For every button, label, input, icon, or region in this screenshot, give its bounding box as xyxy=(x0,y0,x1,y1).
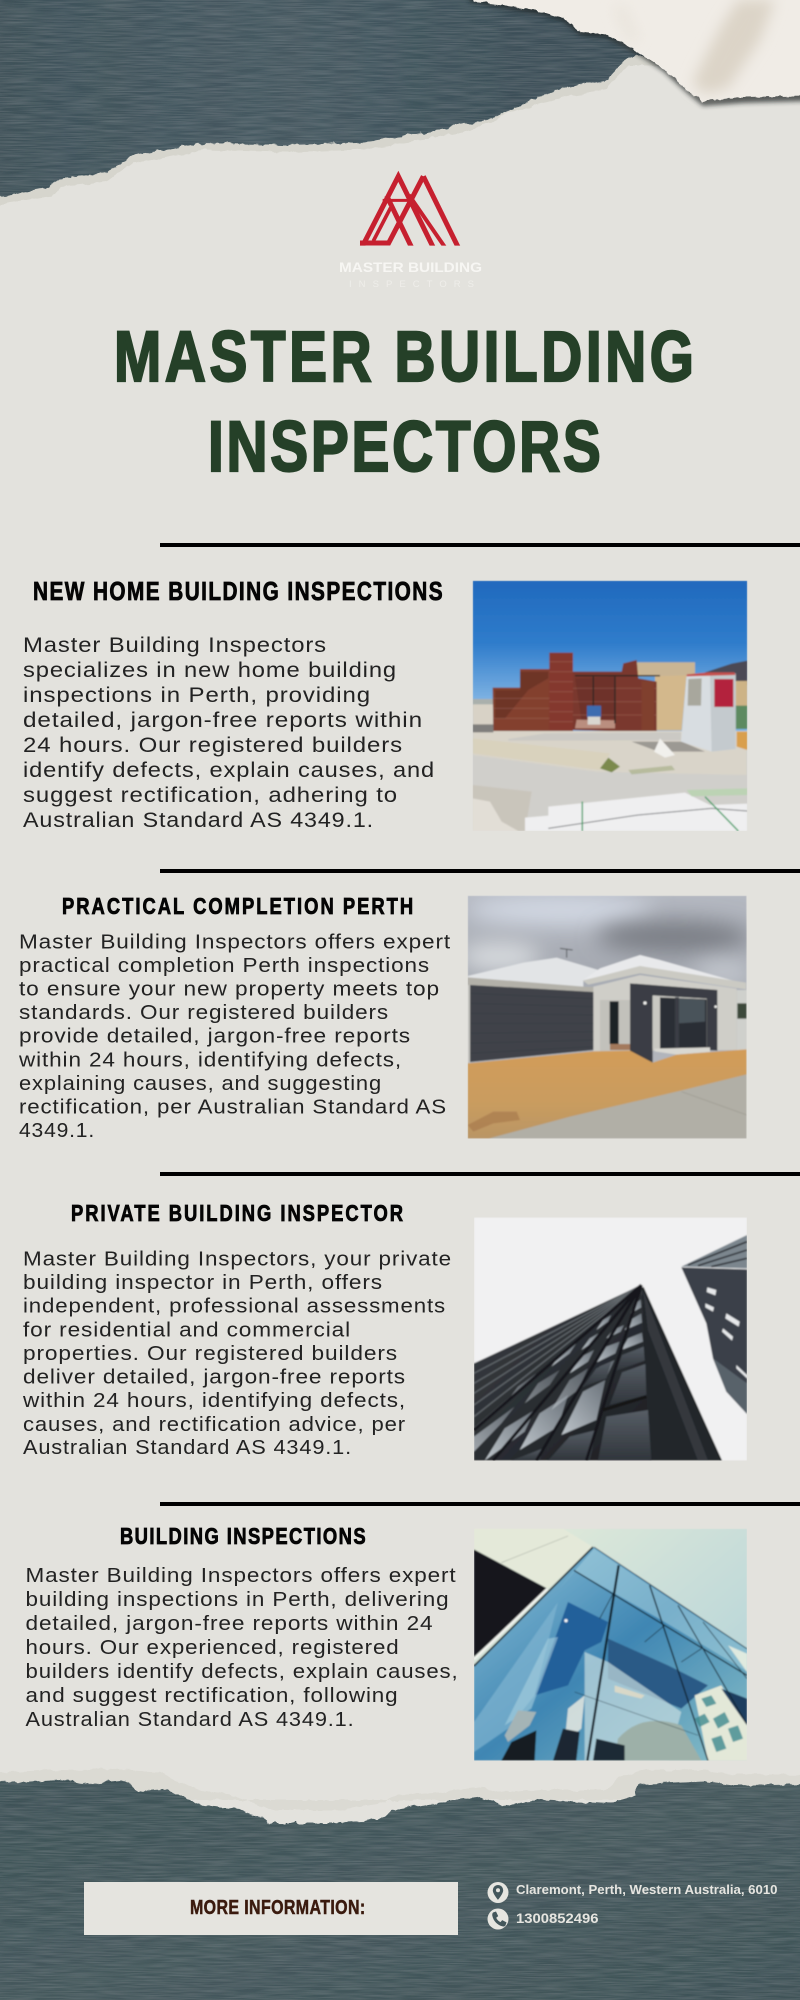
body text: within 24 hours, identifying defects, xyxy=(18,1048,402,1072)
photo: glass building from below xyxy=(474,1529,748,1761)
more information box: MORE INFORMATION: xyxy=(190,1896,365,1918)
phone number: 1300852496 xyxy=(516,1911,599,1926)
photo: skyscrapers from below xyxy=(474,1217,747,1461)
title: INSPECTORS xyxy=(208,407,601,486)
panel: practical completion perth xyxy=(18,894,753,1142)
icon: phone xyxy=(488,1908,508,1930)
body text: causes, and rectification advice, per xyxy=(23,1413,406,1436)
body text: independent, professional assessments xyxy=(23,1294,446,1318)
torn cream paper corner xyxy=(470,0,800,106)
body text: rectification, per Australian Standard AS xyxy=(19,1096,447,1118)
body text: provide detailed, jargon-free reports xyxy=(19,1024,411,1048)
body text: 4349.1. xyxy=(19,1119,95,1142)
body text: properties. Our registered builders xyxy=(23,1342,398,1365)
body text xyxy=(23,633,435,832)
body text: explaining causes, and suggesting xyxy=(19,1072,382,1095)
body text: Master Building Inspectors xyxy=(23,633,327,657)
heading: BUILDING INSPECTIONS xyxy=(120,1524,366,1550)
heading: PRIVATE BUILDING INSPECTOR xyxy=(71,1201,403,1227)
body text: building inspections in Perth, delivering xyxy=(26,1588,450,1611)
title xyxy=(114,317,694,486)
body text: deliver detailed, jargon-free reports xyxy=(23,1366,406,1388)
heading: NEW HOME BUILDING INSPECTIONS xyxy=(33,577,443,606)
contact details xyxy=(488,1882,778,1930)
logo mark xyxy=(360,176,460,252)
body text: practical completion Perth inspections xyxy=(19,954,430,977)
panel: building inspections xyxy=(26,1524,748,1761)
body text: Master Building Inspectors offers expert xyxy=(26,1564,456,1587)
body text: specializes in new home building xyxy=(23,658,397,682)
title: MASTER BUILDING xyxy=(114,317,694,396)
body text: for residential and commercial xyxy=(23,1318,351,1342)
logo wordmark: MASTER BUILDING xyxy=(339,259,482,275)
body text xyxy=(18,930,451,1142)
body text: Australian Standard AS 4349.1. xyxy=(26,1708,354,1731)
body text: inspections in Perth, providing xyxy=(23,683,371,707)
body text: detailed, jargon-free reports within 24 xyxy=(26,1612,434,1635)
body text: Australian Standard AS 4349.1. xyxy=(23,1436,352,1459)
body text: Australian Standard AS 4349.1. xyxy=(23,808,374,832)
body text: and suggest rectification, following xyxy=(26,1684,398,1707)
body text: Master Building Inspectors offers expert xyxy=(19,930,451,954)
torn dark header band xyxy=(0,0,670,206)
body text: building inspector in Perth, offers xyxy=(23,1271,383,1294)
body text: identify defects, explain causes, and xyxy=(23,758,435,782)
photo: completed house xyxy=(460,895,753,1139)
body text: detailed, jargon-free reports within xyxy=(23,708,423,732)
panel: new home building inspections xyxy=(23,577,747,832)
body text: suggest rectification, adhering to xyxy=(23,783,398,807)
body text: hours. Our experienced, registered xyxy=(26,1636,400,1659)
logo xyxy=(339,176,482,290)
address: Claremont, Perth, Western Australia, 6010 xyxy=(516,1882,778,1897)
body text: to ensure your new property meets top xyxy=(19,978,440,1000)
body text: within 24 hours, identifying defects, xyxy=(22,1389,406,1412)
body text: 24 hours. Our registered builders xyxy=(23,733,403,757)
body text xyxy=(22,1248,452,1459)
heading: PRACTICAL COMPLETION PERTH xyxy=(62,894,413,920)
panel: private building inspector xyxy=(22,1201,747,1461)
body text: builders identify defects, explain causes, xyxy=(26,1660,459,1683)
torn dark footer band xyxy=(0,1769,800,2000)
logo: INSPECTORS xyxy=(349,279,474,290)
icon: location pin xyxy=(488,1882,508,1903)
photo: house under construction xyxy=(473,581,747,831)
more information box xyxy=(84,1882,458,1935)
body text: Master Building Inspectors, your private xyxy=(23,1248,452,1270)
body text xyxy=(26,1564,459,1731)
body text: standards. Our registered builders xyxy=(19,1001,389,1024)
